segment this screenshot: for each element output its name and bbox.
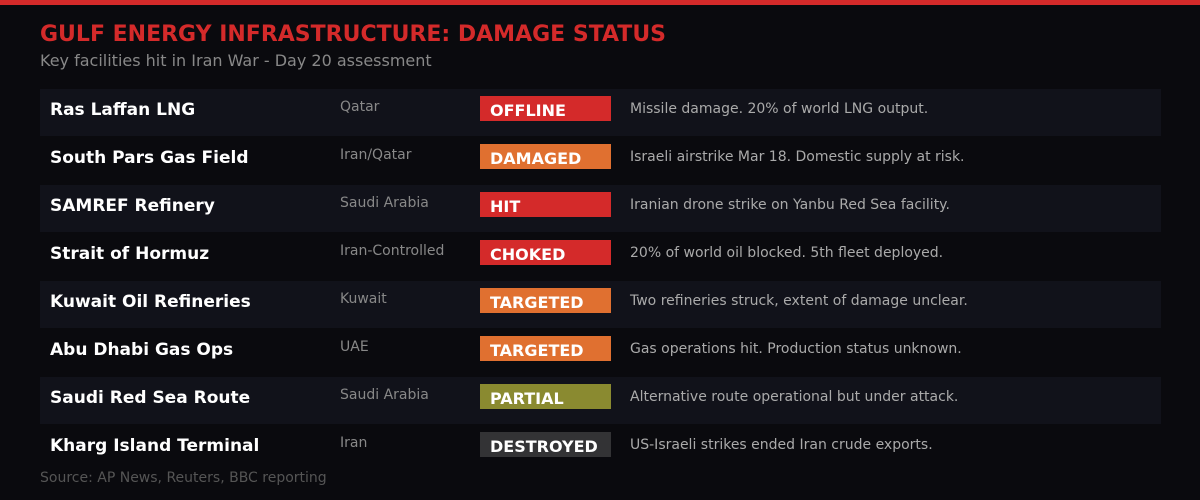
row: Ras Laffan: Qatar [340,99,379,115]
row: South Pars: Israeli airstrike Mar 18. Domestic supply at risk. [630,149,965,165]
row: Red Sea Route: Saudi Red Sea Route [50,388,250,408]
row: South Pars [50,144,965,169]
row: Kharg [50,432,933,457]
row: Hormuz: 20% of world oil blocked. 5th fleet deployed. [630,245,943,261]
row: Ras Laffan: OFFLINE [490,101,566,120]
source note: Source: AP News, Reuters, BBC reporting [40,470,327,486]
row: Kharg: Kharg Island Terminal [50,436,259,456]
row: SAMREF: SAMREF Refinery [50,196,215,216]
row: Kharg: US-Israeli strikes ended Iran crude exports. [630,437,933,453]
row: Red Sea Route: Alternative route operational but under attack. [630,389,958,405]
row: Hormuz: Iran-Controlled [340,243,444,259]
row: Hormuz: CHOKED [490,245,565,264]
row: Ras Laffan [40,89,1161,136]
top accent bar [0,0,1200,5]
row: Kharg: DESTROYED [490,437,598,456]
row: Red Sea Route: Saudi Arabia [340,387,429,403]
row: South Pars: Iran/Qatar [340,147,411,163]
row: Abu Dhabi: Abu Dhabi Gas Ops [50,340,233,360]
row: SAMREF [40,185,1161,232]
row: Kharg: Iran [340,435,367,451]
row: Kuwait: Two refineries struck, extent of damage unclear. [630,293,968,309]
row: Kuwait [40,281,1161,328]
row: Abu Dhabi: TARGETED [490,341,584,360]
row: SAMREF: Iranian drone strike on Yanbu Red Sea facility. [630,197,950,213]
row: Kuwait: Kuwait Oil Refineries [50,292,251,312]
row: SAMREF: Saudi Arabia [340,195,429,211]
row: South Pars: South Pars Gas Field [50,148,248,168]
row: Abu Dhabi [50,336,962,361]
row: Red Sea Route [40,377,1161,424]
row: Abu Dhabi: Gas operations hit. Production status unknown. [630,341,962,357]
row: South Pars: DAMAGED [490,149,581,168]
row: Kuwait: TARGETED [490,293,584,312]
row: Abu Dhabi: UAE [340,339,369,355]
row: Red Sea Route: PARTIAL [490,389,564,408]
row: Hormuz: Strait of Hormuz [50,244,209,264]
subtitle: Key facilities hit in Iran War - Day 20 assessment [40,51,432,70]
row: Kuwait: Kuwait [340,291,387,307]
row: Hormuz [50,240,943,265]
row: Ras Laffan: Ras Laffan LNG [50,100,195,120]
title: GULF ENERGY INFRASTRUCTURE: DAMAGE STATUS [40,22,666,47]
row: Ras Laffan: Missile damage. 20% of world LNG output. [630,101,928,117]
row: SAMREF: HIT [490,197,520,216]
